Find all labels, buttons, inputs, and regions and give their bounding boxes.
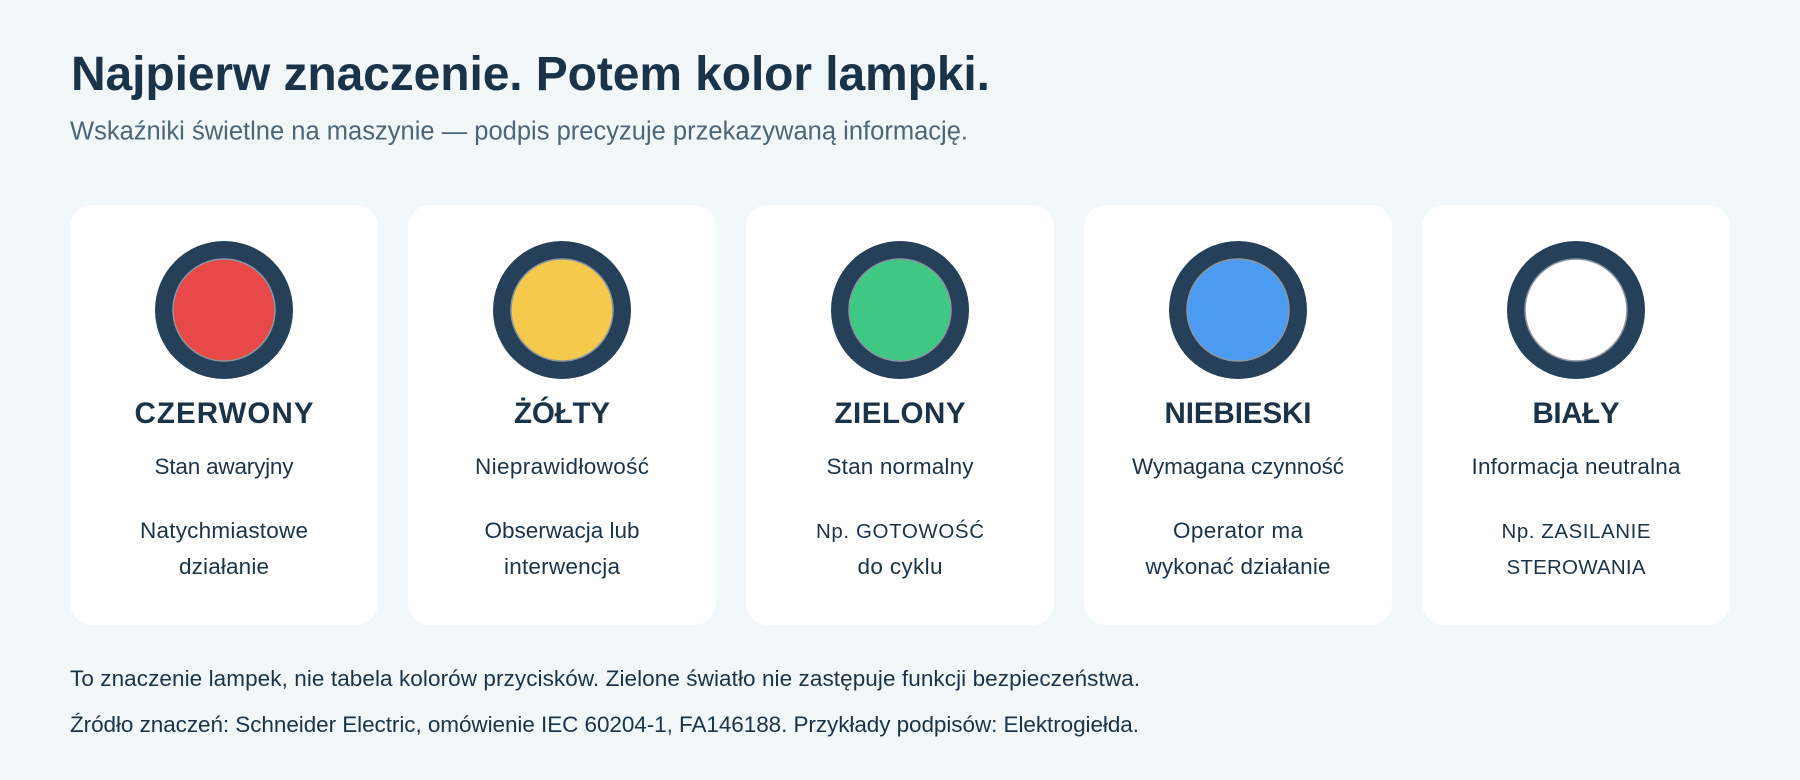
meaning: zielony: Stan normalny [826,454,974,479]
action: niebieski: Operator ma [1173,518,1303,543]
heading: niebieski: NIEBIESKI [1164,397,1312,430]
icon: red lamp [155,241,293,379]
action: niebieski [1144,518,1330,579]
action: niebieski: wykonać działanie [1144,554,1330,579]
heading: biały: BIAŁY [1532,397,1620,430]
panel: niebieski [1084,205,1392,625]
meaning: żółty: Nieprawidłowość [475,454,649,479]
action: czerwony: Natychmiastowe [140,518,308,543]
icon: white lamp [1507,241,1645,379]
action: zielony: Np. GOTOWOŚĆ [816,519,984,543]
action: żółty: interwencja [504,554,620,579]
icon: yellow lamp [493,241,631,379]
panel: żółty [408,205,716,625]
footnote: To znaczenie lampek, nie tabela kolorów przycisków. Zielone światło nie zastępuje funkcji bezpieczeństwa. [70,666,1140,691]
heading: czerwony: CZERWONY [134,397,314,430]
subtitle: Wskaźniki świetlne na maszynie — podpis precyzuje przekazywaną informację. [70,118,968,146]
panel: biały [1422,205,1730,625]
action: żółty: Obserwacja lub [484,518,640,543]
heading: zielony: ZIELONY [834,397,966,430]
icon: blue lamp [1169,241,1307,379]
panel: czerwony [70,205,378,625]
action: biały: STEROWANIA [1506,556,1646,579]
action: żółty [484,518,640,579]
action: zielony [816,519,984,579]
source note: Źródło znaczeń: Schneider Electric, omówienie IEC 60204-1, FA146188. Przykłady podpisów: Elektrogiełda. [70,712,1139,737]
action: czerwony [140,518,308,579]
meaning: czerwony: Stan awaryjny [154,454,294,479]
heading: żółty: ŻÓŁTY [514,396,610,430]
action: biały: Np. ZASILANIE [1502,520,1650,543]
title: Najpierw znaczenie. Potem kolor lampki. [71,48,990,101]
icon: green lamp [831,241,969,379]
meaning: biały: Informacja neutralna [1472,454,1681,479]
panel: zielony [746,205,1054,625]
action: biały [1502,520,1650,579]
action: zielony: do cyklu [858,554,942,579]
meaning: niebieski: Wymagana czynność [1132,454,1344,479]
action: czerwony: działanie [179,554,269,579]
